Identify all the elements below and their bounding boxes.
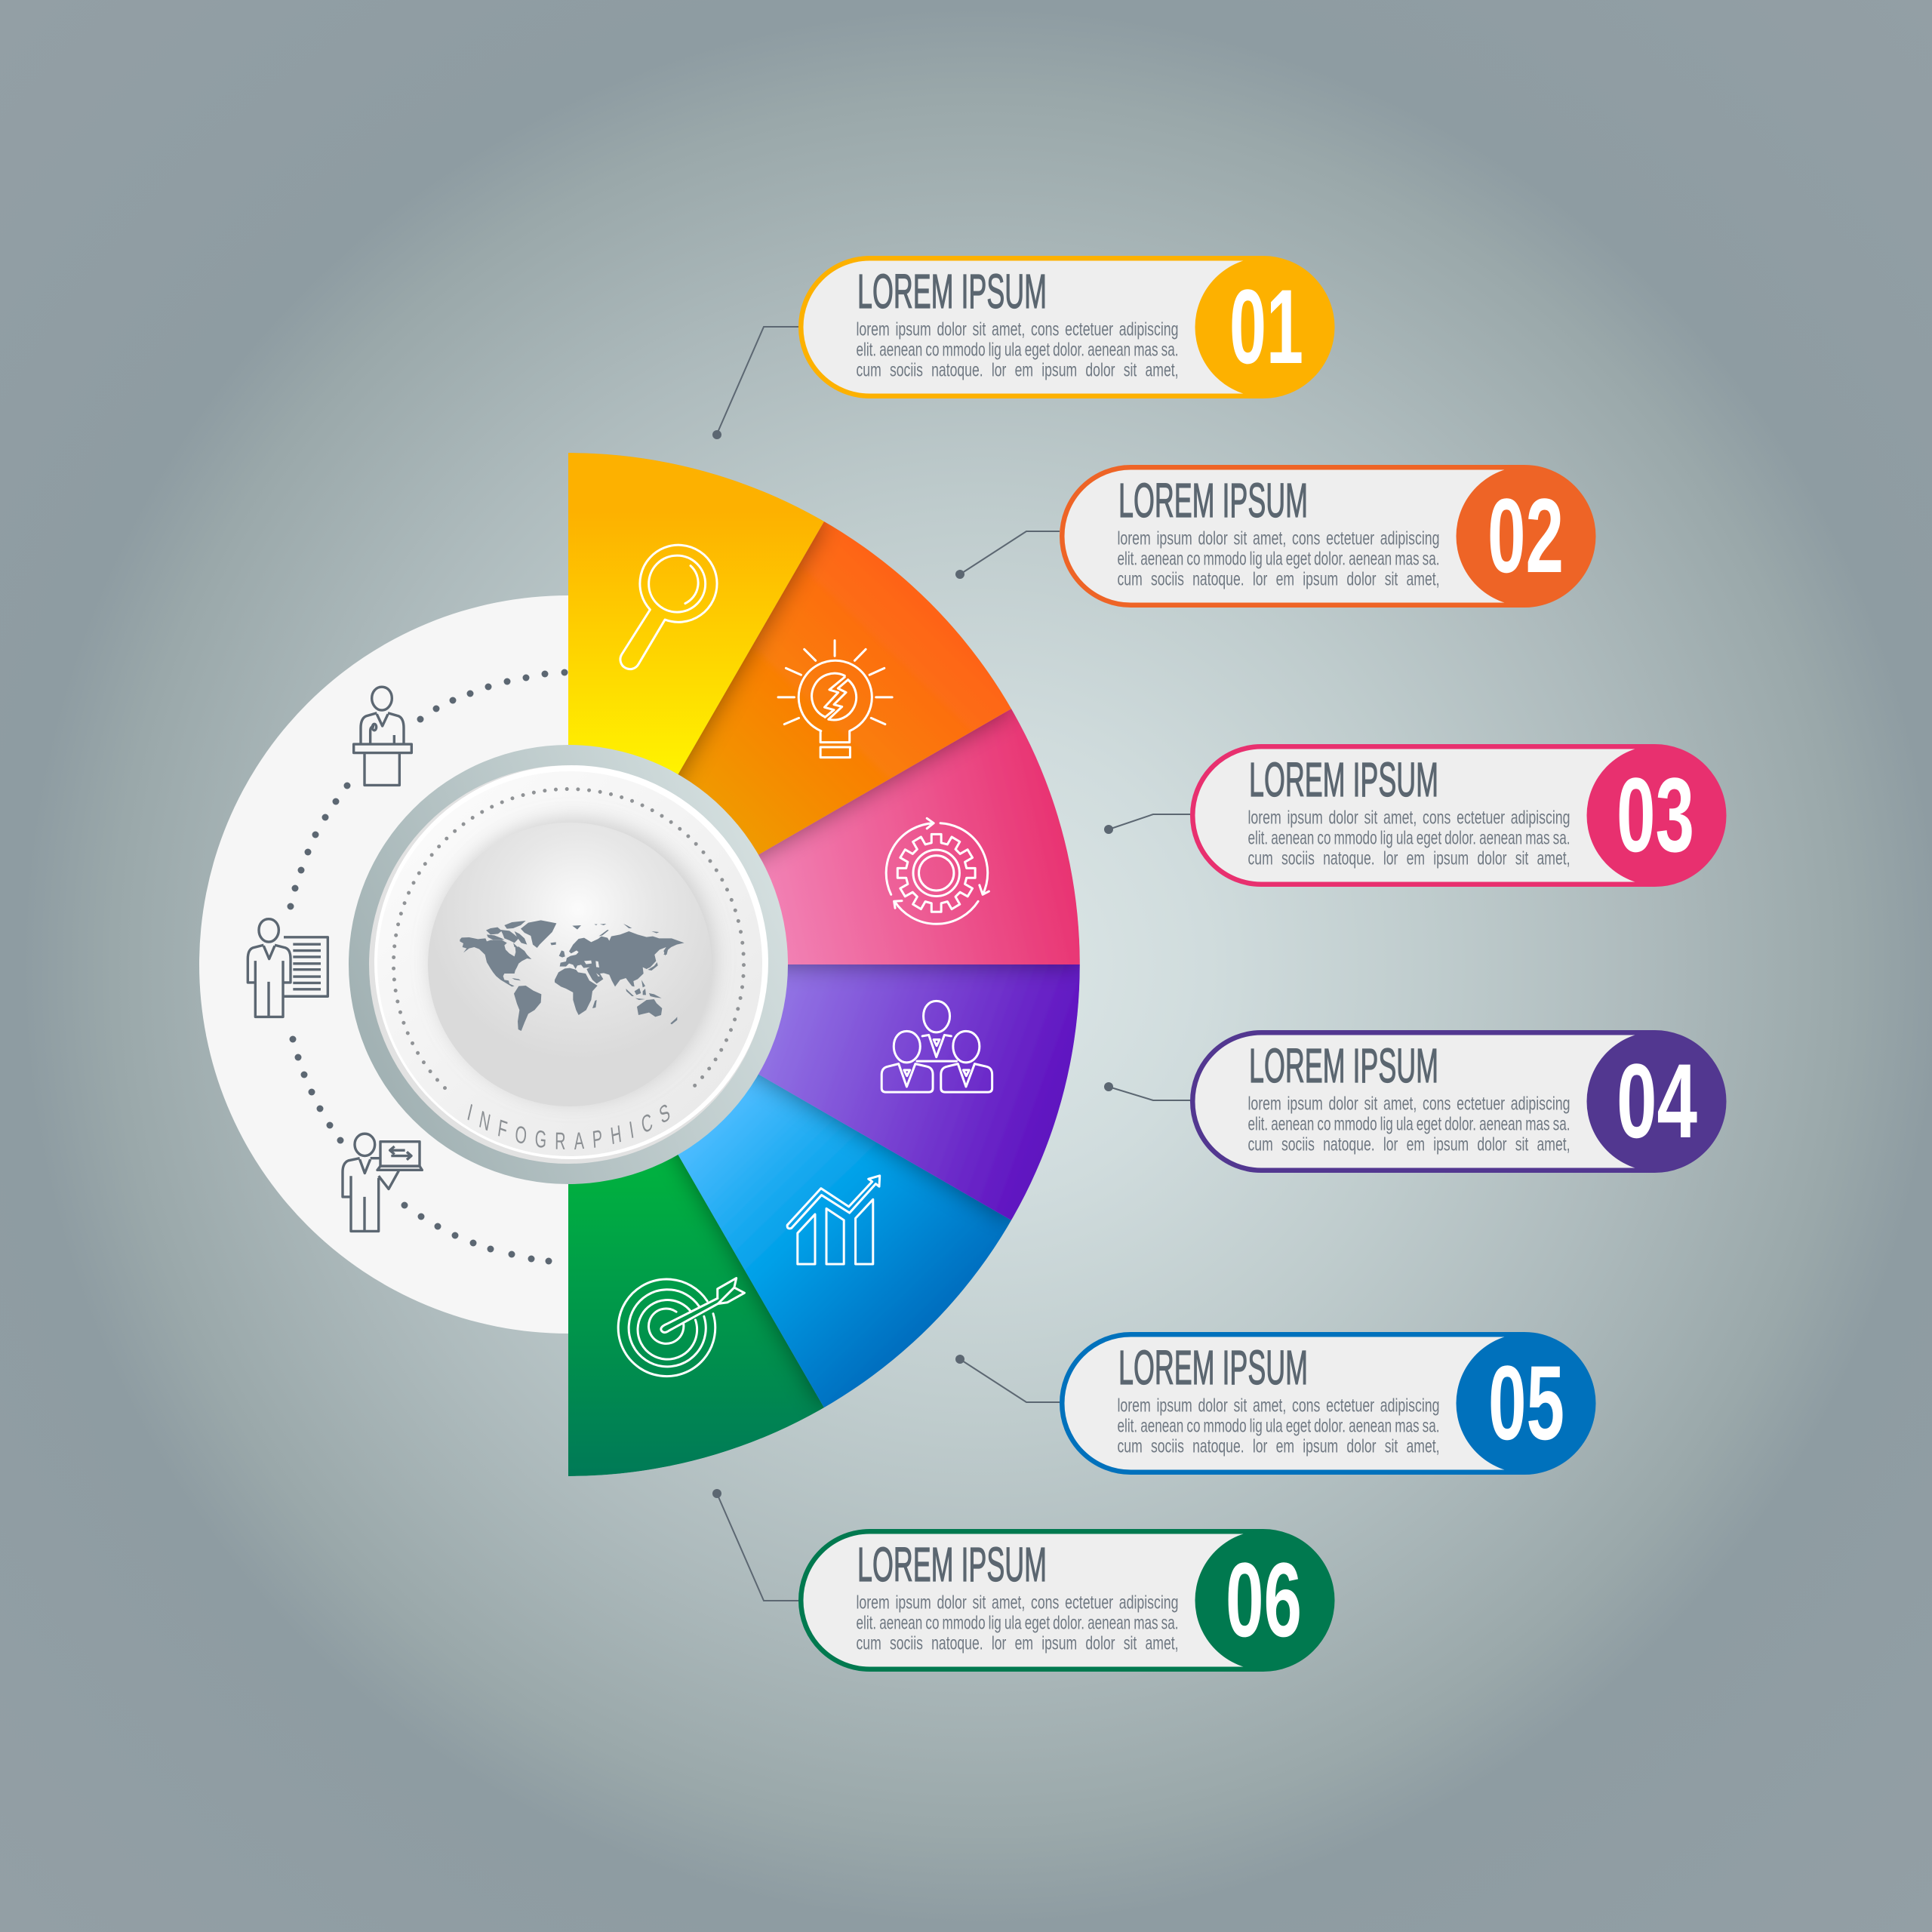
panel: item 05: lorem ipsum dolor sit amet, cons ectetuer adipiscing (1117, 1395, 1440, 1416)
connector 5 (955, 1355, 1060, 1402)
panel: item 05: cum sociis natoque. lor em ipsum dolor sit amet, (1117, 1435, 1440, 1457)
connector 6 (712, 1489, 798, 1601)
icon: gear with cycle arrows (886, 818, 989, 924)
centre badge with world map (349, 745, 788, 1184)
icon: rising bar chart (787, 1176, 880, 1264)
panel: item 04: elit. aenean co mmodo lig ula eget dolor. aenean mas sa. (1248, 1114, 1570, 1135)
panel: item 02: lorem ipsum dolor sit amet, cons ectetuer adipiscing (1117, 528, 1440, 549)
panel: item 03: 03 (1617, 755, 1694, 874)
panel: item 04 (1192, 1032, 1727, 1171)
panel: white half circle with presenters (199, 595, 568, 1334)
panel: item 04: cum sociis natoque. lor em ipsum dolor sit amet, (1248, 1134, 1570, 1155)
panel: item 03: elit. aenean co mmodo lig ula eget dolor. aenean mas sa. (1248, 827, 1570, 848)
panel: item 06 (801, 1531, 1334, 1670)
map: Eurasia, Africa and Oceania (555, 924, 685, 1024)
panel: item 04: 04 (1617, 1041, 1697, 1160)
panel: item 03: cum sociis natoque. lor em ipsum dolor sit amet, (1248, 848, 1570, 869)
panel: item 06: LOREM IPSUM (857, 1537, 1047, 1592)
panel: item 05: elit. aenean co mmodo lig ula eget dolor. aenean mas sa. (1117, 1416, 1440, 1437)
panel: item 02: elit. aenean co mmodo lig ula eget dolor. aenean mas sa. (1117, 548, 1440, 569)
segment 4 purple (750, 964, 1080, 1229)
inner disc (428, 823, 712, 1106)
panel: item 05 (1062, 1334, 1595, 1473)
icon: presenter with laptop (343, 1134, 422, 1231)
curved label: INFOGRAPHICS (468, 1104, 670, 1150)
panel: item 03: LOREM IPSUM (1249, 752, 1438, 807)
segment 2 orange (678, 521, 1017, 869)
panel: item 06: cum sociis natoque. lor em ipsum dolor sit amet, (856, 1633, 1179, 1654)
panel: item 06: 06 (1226, 1540, 1302, 1659)
panel: item 06: lorem ipsum dolor sit amet, cons ectetuer adipiscing (856, 1592, 1179, 1614)
icon: magnifier (620, 545, 717, 669)
panel: item 04: lorem ipsum dolor sit amet, cons ectetuer adipiscing (1248, 1093, 1570, 1114)
panel: item 05: 05 (1488, 1343, 1564, 1462)
panel: item 02: cum sociis natoque. lor em ipsum dolor sit amet, (1117, 569, 1440, 590)
connector 1 (712, 327, 798, 439)
panel: item 01 (801, 257, 1334, 397)
world map (460, 920, 685, 1031)
panel: item 03: lorem ipsum dolor sit amet, cons ectetuer adipiscing (1248, 808, 1570, 829)
panel: item 03 (1192, 746, 1727, 885)
panel: item 01: elit. aenean co mmodo lig ula eget dolor. aenean mas sa. (856, 340, 1179, 361)
map: Americas and Greenland (460, 920, 556, 1031)
panel: item 05: LOREM IPSUM (1118, 1340, 1308, 1395)
fan of six coloured segments (568, 453, 1080, 1476)
icon: target with arrow (618, 1278, 744, 1377)
panel: item 01: 01 (1229, 267, 1303, 386)
dotted ring (394, 789, 744, 1088)
icon: team of three people (881, 1001, 992, 1092)
panel: item 01: lorem ipsum dolor sit amet, cons ectetuer adipiscing (856, 318, 1179, 340)
panel: item 04: LOREM IPSUM (1249, 1038, 1438, 1093)
panel: item 06: elit. aenean co mmodo lig ula eget dolor. aenean mas sa. (856, 1612, 1179, 1633)
panel: item 02: LOREM IPSUM (1118, 473, 1308, 528)
panel: item 02: 02 (1487, 476, 1564, 595)
panel: item 02 (1062, 466, 1595, 606)
segment 1 yellow (568, 453, 834, 782)
segment 5 blue (666, 1075, 1011, 1411)
panel: item 01: cum sociis natoque. lor em ipsum dolor sit amet, (856, 359, 1179, 380)
icon: presenter with document board (248, 919, 328, 1017)
panel: item 01: LOREM IPSUM (857, 264, 1047, 318)
icon: light bulb (778, 641, 892, 758)
connector 4 (1104, 1082, 1190, 1100)
dotted arc on white panel (287, 669, 568, 1265)
segment 3 pink (758, 709, 1080, 980)
connector 2 (955, 531, 1060, 579)
connector 3 (1104, 814, 1190, 834)
icon: presenter at podium (354, 687, 411, 785)
segment 6 green (568, 1155, 824, 1476)
